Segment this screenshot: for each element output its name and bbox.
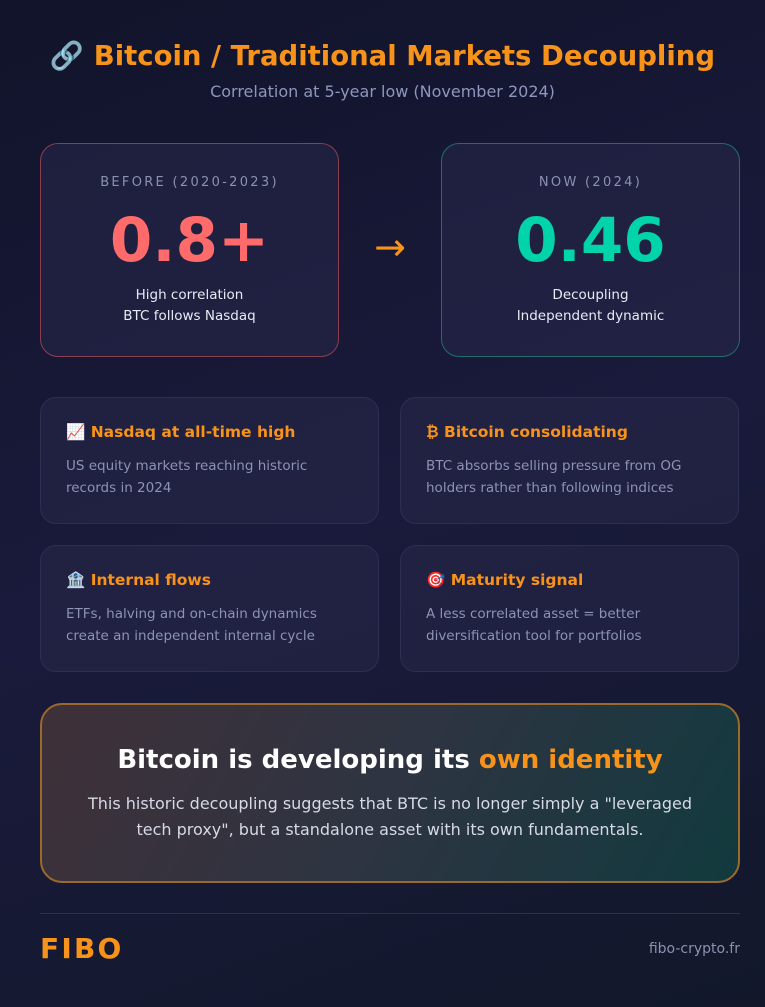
text: internal flows: ETFs, halving and on-chain dynamics create an independent internal cycle <box>66 606 317 644</box>
callout <box>40 703 740 883</box>
label: now: NOW (2024) <box>539 175 642 190</box>
text: maturity: A less correlated asset = better diversification tool for portfolios <box>426 606 642 644</box>
arrow: → <box>374 225 406 269</box>
panel: now <box>441 143 740 357</box>
card: internal flows <box>40 545 379 672</box>
description: now: Decoupling <box>552 287 629 303</box>
text: nasdaq: US equity markets reaching historic records in 2024 <box>66 458 307 496</box>
subtitle: Correlation at 5-year low (November 2024) <box>210 82 555 101</box>
label: before: BEFORE (2020-2023) <box>100 175 279 190</box>
callout text: tech proxy", but a standalone asset with its own fundamentals. <box>136 820 644 839</box>
title: 🔗 Bitcoin / Traditional Markets Decoupling <box>50 40 715 72</box>
callout text <box>88 794 692 839</box>
heading: internal flows: 🏦 Internal flows <box>66 571 211 589</box>
text: bitcoin: BTC absorbs selling pressure from OG holders rather than following indices <box>426 458 681 496</box>
description: before: High correlation <box>136 287 243 303</box>
description: before <box>123 287 256 324</box>
heading: bitcoin: ₿ Bitcoin consolidating <box>426 423 628 441</box>
card: maturity <box>400 545 739 672</box>
footer logo: FIBO <box>40 932 124 965</box>
callout text: This historic decoupling suggests that BTC is no longer simply a "leveraged <box>88 794 692 813</box>
number: 0.46: 0.46 <box>515 205 666 276</box>
number: 0.8+: 0.8+ <box>110 205 269 276</box>
description: before: BTC follows Nasdaq <box>123 308 256 324</box>
description: now: Independent dynamic <box>517 308 664 324</box>
card: bitcoin consolidating <box>400 397 739 524</box>
footer url: fibo-crypto.fr <box>649 941 740 957</box>
callout heading: Bitcoin is developing its own identity <box>117 745 663 775</box>
heading: maturity: 🎯 Maturity signal <box>426 571 583 589</box>
card: nasdaq <box>40 397 379 524</box>
heading: nasdaq: 📈 Nasdaq at all-time high <box>66 423 295 441</box>
description: now <box>517 287 664 324</box>
panel: before <box>40 143 339 357</box>
